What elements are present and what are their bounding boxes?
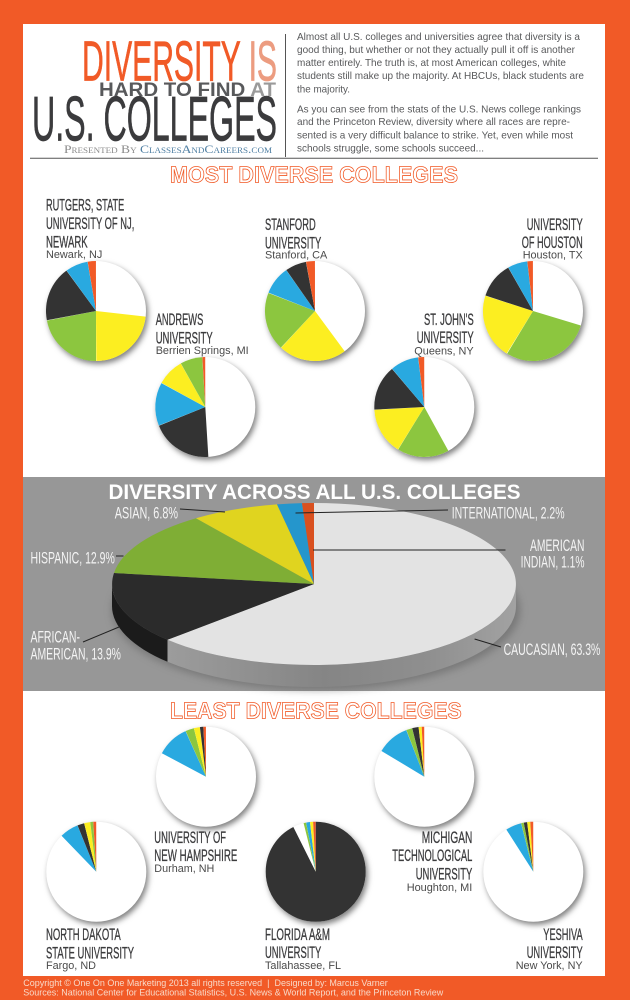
pie: Rutgers <box>46 261 146 361</box>
college: St. John's <box>374 310 474 457</box>
leader: American Indian <box>313 549 506 551</box>
intro text: good thing, but whether or not they actually pull it off is another <box>297 44 575 56</box>
label: Houston: Houston, TX <box>523 250 583 262</box>
label: Stanford: UNIVERSITY <box>265 233 321 252</box>
title: diversity is: DIVERSITY IS <box>82 31 277 94</box>
label: African-American: AFRICAN- <box>30 628 80 647</box>
label: International: INTERNATIONAL, 2.2% <box>452 503 565 522</box>
pie: Michigan Tech <box>374 727 474 827</box>
leader: African-American <box>83 627 119 642</box>
panel heading: DIVERSITY ACROSS ALL U.S. COLLEGES <box>108 480 520 504</box>
label: North Dakota State: STATE UNIVERSITY <box>46 943 134 962</box>
title: hard to find at: HARD TO FIND AT <box>99 79 276 101</box>
pie: St. John's <box>374 357 474 457</box>
footer credits <box>23 978 443 999</box>
pie: Houston <box>483 261 583 361</box>
label: Yeshiva: New York, NY <box>516 960 583 972</box>
label: Florida A&M: Tallahassee, FL <box>265 960 341 972</box>
label: Houston <box>522 215 583 262</box>
title block <box>32 31 277 156</box>
label: Houston: UNIVERSITY <box>527 215 583 234</box>
label: American Indian: INDIAN, 1.1% <box>521 553 584 572</box>
label: Rutgers: RUTGERS, STATE <box>46 196 124 215</box>
intro text: schools struggle, some schools succeed... <box>297 142 484 154</box>
heading: most diverse colleges: MOST DIVERSE COLLEGES <box>170 162 458 188</box>
label: Michigan Tech: MICHIGAN <box>422 828 472 847</box>
intro text <box>297 31 584 155</box>
label: New Hampshire: UNIVERSITY OF <box>154 828 226 847</box>
pie: North Dakota State <box>46 822 146 922</box>
intro text: sented is a very difficult balance to strike. Yet, even while most <box>297 130 573 142</box>
label: American Indian <box>521 536 584 572</box>
label: North Dakota State: NORTH DAKOTA <box>46 925 121 944</box>
label: Florida A&M: UNIVERSITY <box>265 943 321 962</box>
college: Rutgers <box>46 196 146 361</box>
label: Michigan Tech: Houghton, MI <box>407 882 472 894</box>
pie: Stanford <box>265 261 365 361</box>
intro text: the majority. <box>297 84 350 96</box>
label: Stanford: STANFORD <box>265 215 316 234</box>
label: Asian: ASIAN, 6.8% <box>115 503 178 522</box>
intro text: As you can see from the stats of the U.S. News college rankings <box>297 104 581 116</box>
label: Stanford <box>265 215 328 262</box>
label: Andrews: Berrien Springs, MI <box>156 345 249 357</box>
intro text: students still make up the majority. At HBCUs, black students are <box>297 70 584 82</box>
pie: Florida A&M <box>266 822 366 922</box>
label: North Dakota State <box>46 925 134 972</box>
label: Michigan Tech <box>392 828 472 894</box>
college: University of Houston <box>483 215 583 361</box>
footer credits: Sources: National Center for Educational Statistics, U.S. News & World Report, and the Princeton Review <box>23 988 443 999</box>
intro text: Almost all U.S. colleges and universities agree that diversity is a <box>297 31 580 43</box>
college: North Dakota State <box>46 822 146 972</box>
leader: Asian <box>180 509 225 512</box>
college: Yeshiva <box>483 822 583 972</box>
label: Stanford: Stanford, CA <box>265 250 328 262</box>
label: Rutgers: UNIVERSITY OF NJ, <box>46 214 134 233</box>
heading: least diverse colleges: LEAST DIVERSE COLLEGES <box>170 698 462 724</box>
label: African-American <box>30 628 121 663</box>
label: Andrews: ANDREWS <box>156 310 203 329</box>
label: New Hampshire: Durham, NH <box>154 863 214 875</box>
panel: diversity across all colleges <box>23 477 605 691</box>
college: Andrews <box>155 310 255 457</box>
label: Rutgers: Newark, NJ <box>46 249 102 261</box>
leader: Hispanic <box>116 555 124 557</box>
footer credits: Copyright © One On One Marketing 2013 all rights reserved | Designed by: Marcus Varner <box>23 978 388 989</box>
label: American Indian: AMERICAN <box>530 536 584 555</box>
label: Andrews: UNIVERSITY <box>156 328 213 347</box>
label: Yeshiva: UNIVERSITY <box>527 943 583 962</box>
pie: Yeshiva <box>483 822 583 922</box>
label: New Hampshire <box>154 828 237 875</box>
label: North Dakota State: Fargo, ND <box>46 960 96 972</box>
intro text: and the Princeton Review, diversity where all races are repre- <box>297 116 570 128</box>
label: Yeshiva <box>516 925 583 972</box>
label: St. John's <box>414 310 474 358</box>
college: Stanford <box>265 215 365 361</box>
title: U.S. colleges: U.S. COLLEGES <box>32 84 277 154</box>
label: Michigan Tech: UNIVERSITY <box>416 864 472 883</box>
leader: International <box>296 510 448 513</box>
label: African-American: AMERICAN, 13.9% <box>30 644 121 663</box>
label: Rutgers: NEWARK <box>46 232 88 251</box>
label: Michigan Tech: TECHNOLOGICAL <box>392 846 472 865</box>
label: Florida A&M <box>265 925 341 972</box>
intro text: matter entirely. The truth is, at most American colleges, white <box>297 57 566 69</box>
label: St. John's: Queens, NY <box>414 346 474 358</box>
college: Michigan Tech <box>374 727 474 894</box>
label: New Hampshire: NEW HAMPSHIRE <box>154 846 237 865</box>
college: Florida A&M <box>265 822 366 972</box>
pie: New Hampshire <box>156 727 256 827</box>
label: Florida A&M: FLORIDA A&M <box>265 925 330 944</box>
label: Yeshiva: YESHIVA <box>543 925 583 944</box>
label: Andrews <box>156 310 249 357</box>
college: University of New Hampshire <box>154 727 256 875</box>
label: St. John's: UNIVERSITY <box>417 328 474 347</box>
label: Hispanic: HISPANIC, 12.9% <box>30 548 115 567</box>
label: St. John's: ST. JOHN'S <box>424 310 474 329</box>
3D pie chart <box>112 503 520 690</box>
label: Rutgers <box>46 196 134 261</box>
leader: Caucasian <box>475 639 501 647</box>
presented by line: Presented By ClassesAndCareers.com <box>64 142 272 156</box>
pie: Andrews <box>155 357 255 457</box>
